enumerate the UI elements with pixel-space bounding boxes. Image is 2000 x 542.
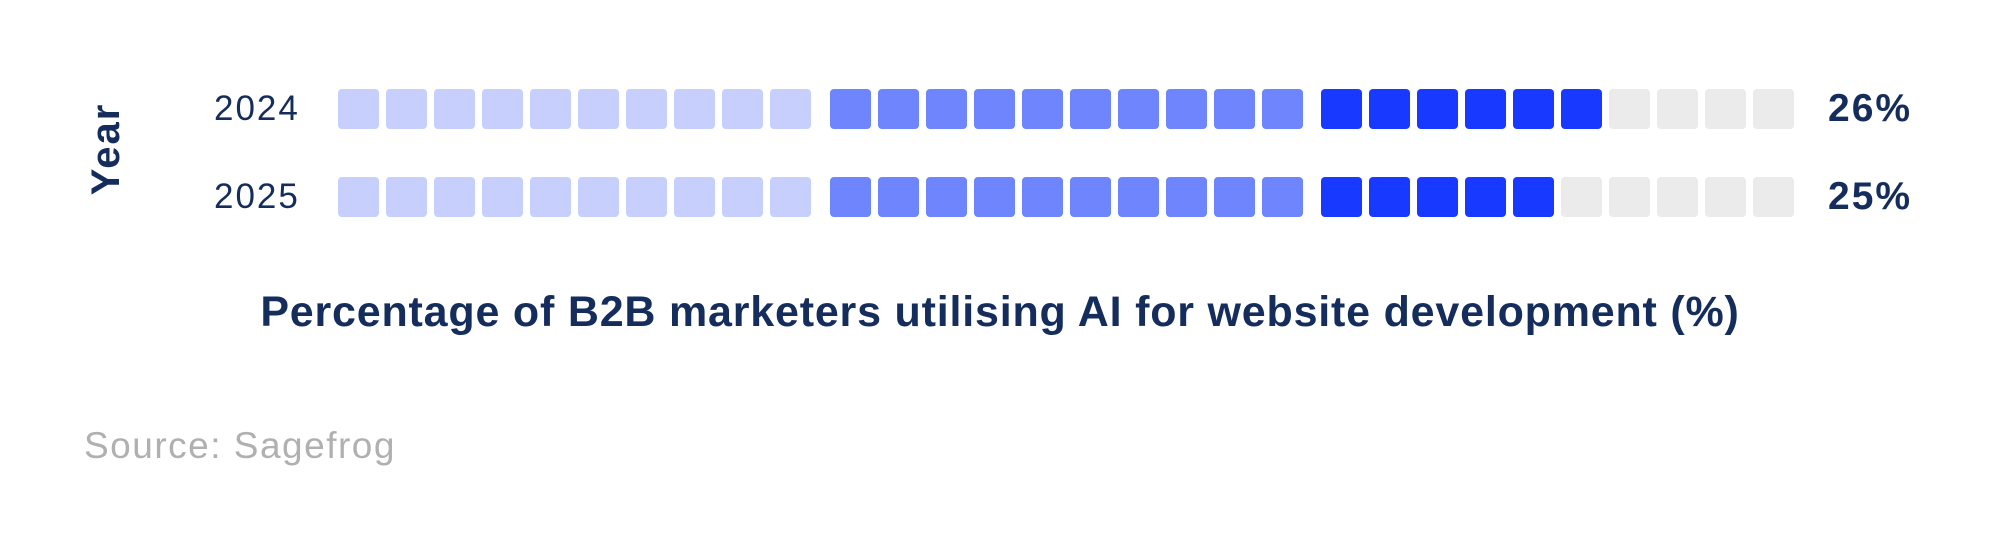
value 26%: 26% [1828, 87, 1912, 130]
axis label: Year: Year [84, 103, 128, 195]
source: Source: Sagefrog [84, 425, 396, 466]
chart title: Percentage of B2B marketers utilising AI for website development (%) [260, 288, 1740, 336]
label: 2024: 2024 [214, 89, 300, 128]
label: 2025: 2025 [214, 177, 300, 216]
waffle row 2025 [338, 177, 1794, 217]
value 25%: 25% [1828, 175, 1912, 218]
waffle row 2024 [338, 89, 1794, 129]
